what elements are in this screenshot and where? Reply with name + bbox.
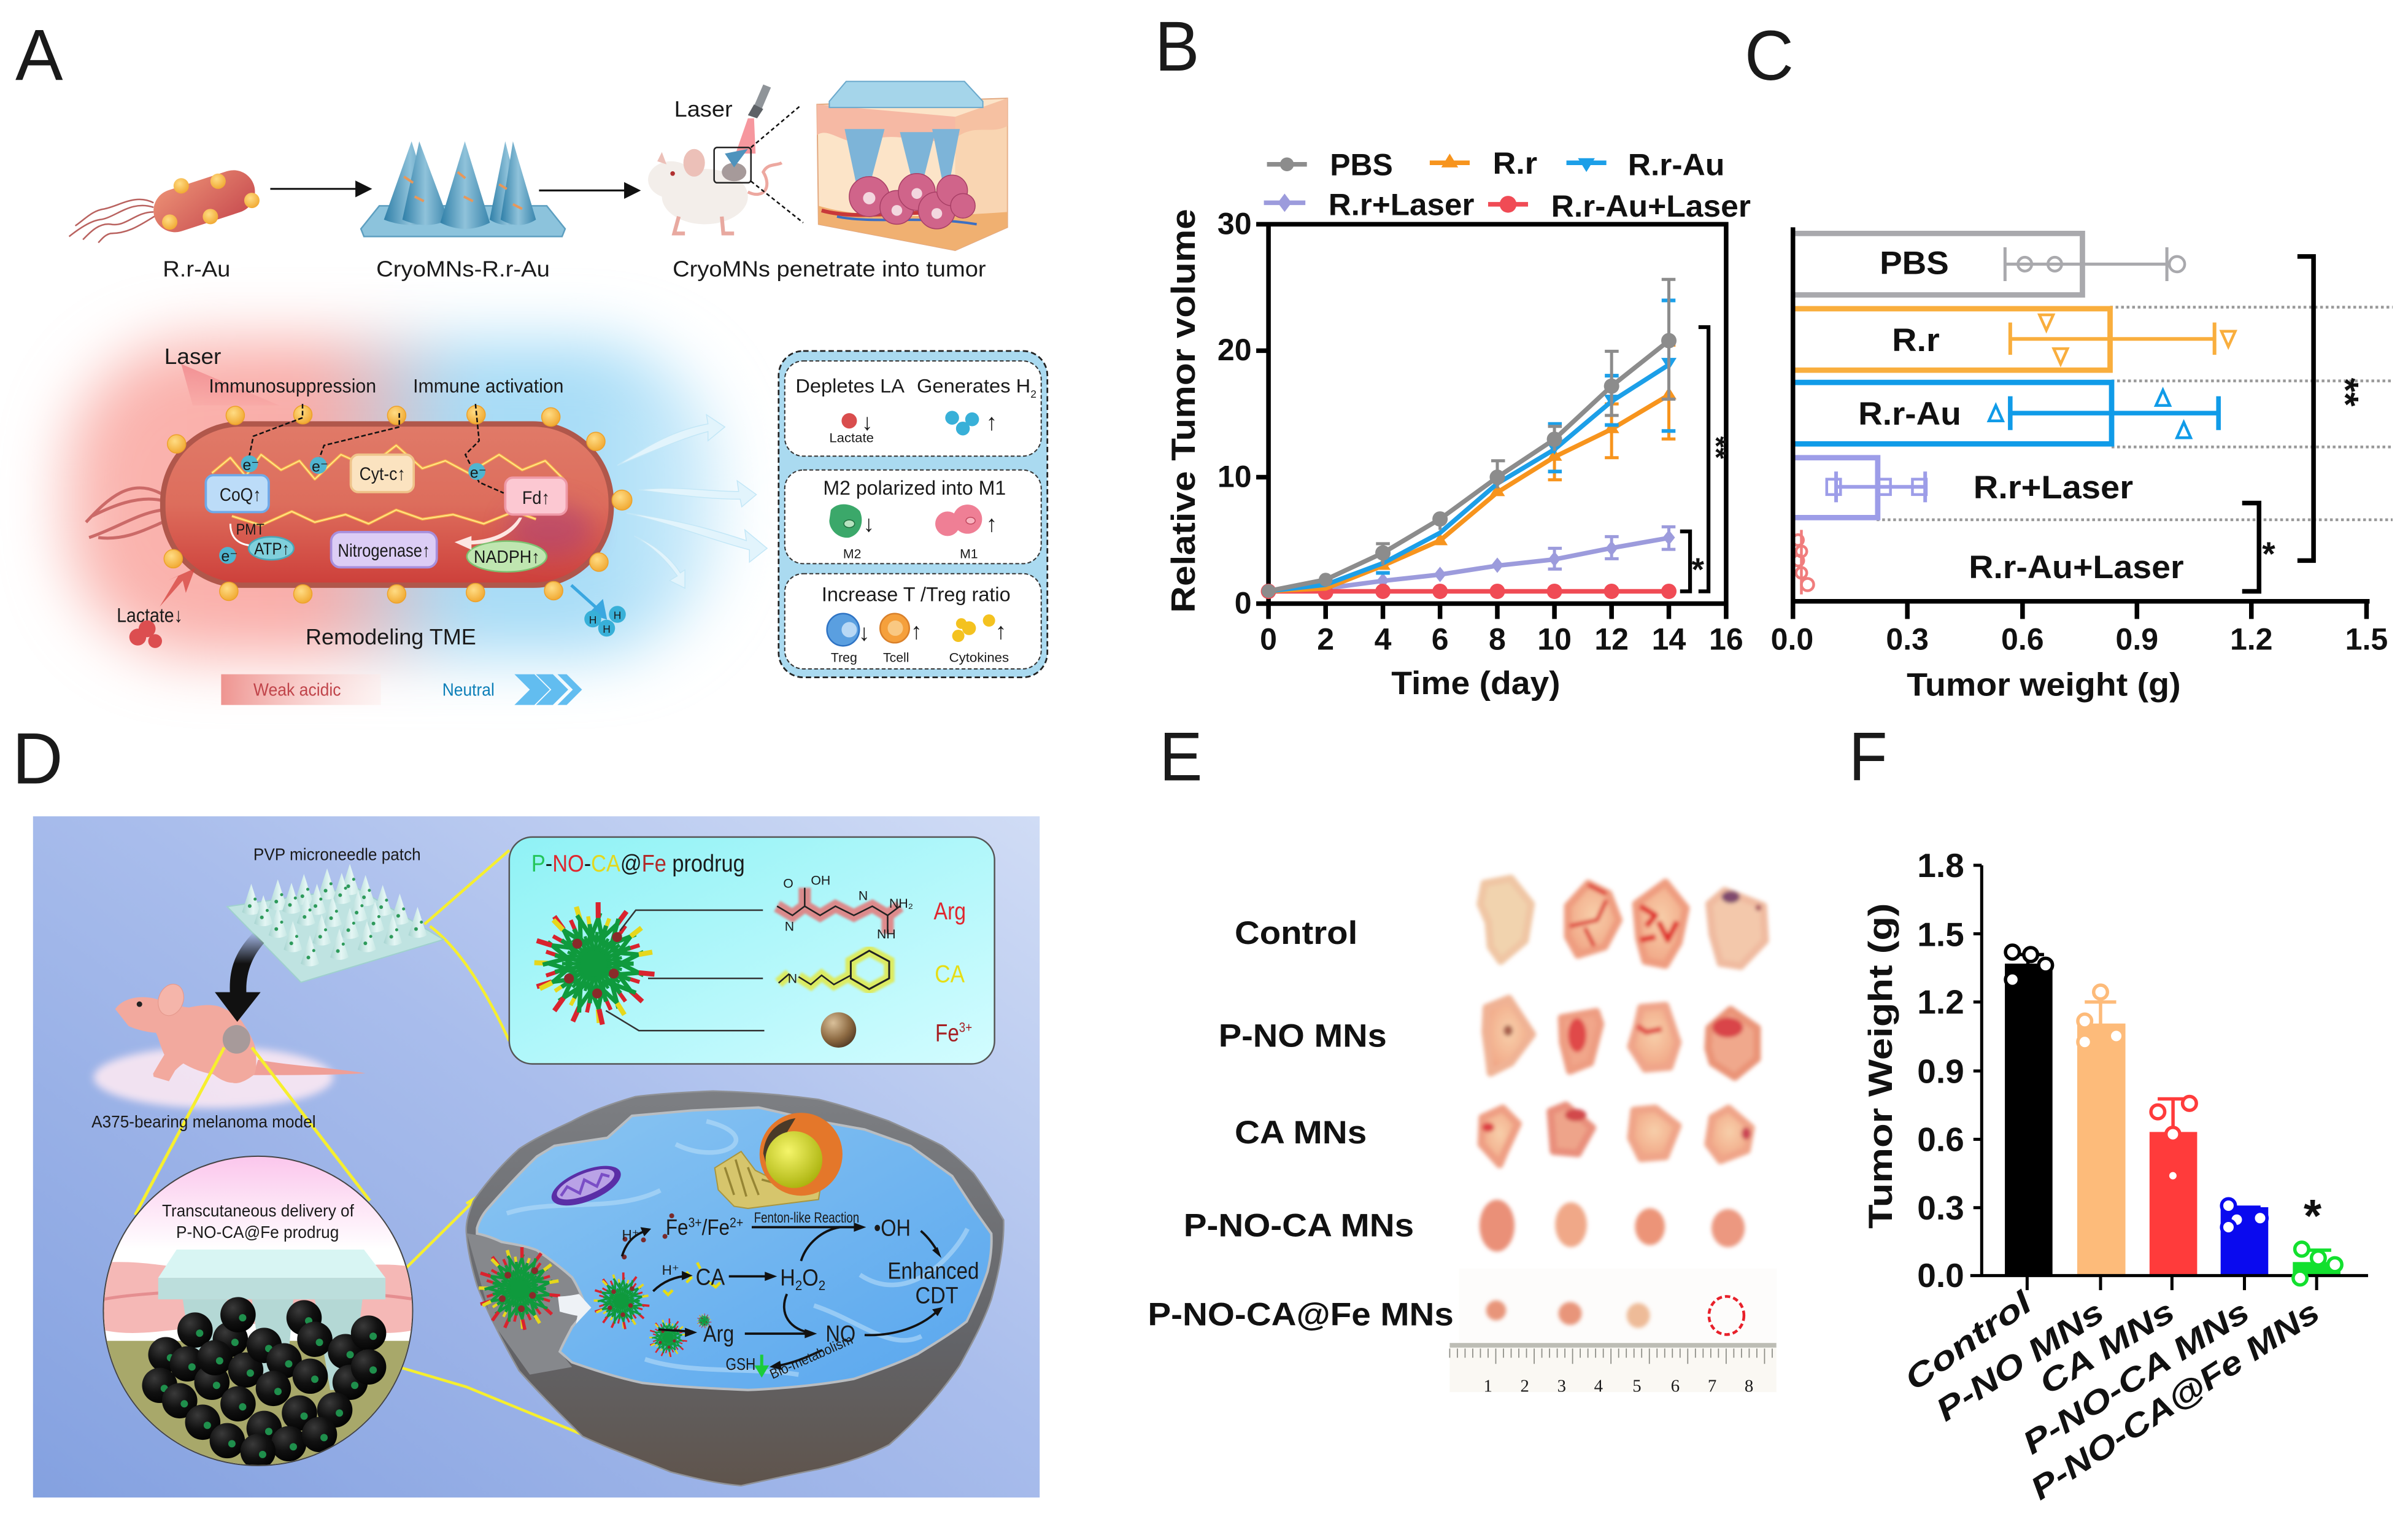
inset label: Transcutaneous delivery of xyxy=(162,1201,354,1220)
x axis ticks xyxy=(1260,622,1743,657)
dashed circle: no tumor xyxy=(1709,1296,1744,1334)
ruler: 3 xyxy=(1557,1376,1566,1396)
bacterium capsule xyxy=(163,424,611,585)
label: Arg: Arg xyxy=(934,898,966,925)
box: Cyt-c xyxy=(351,455,414,492)
released CA fragments xyxy=(663,1262,720,1295)
tumor photos xyxy=(1480,878,1765,1328)
arrow: Fd to Nitrogenase xyxy=(455,517,522,550)
label: Enhanced CDT xyxy=(887,1258,979,1308)
legend: Neutral: Neutral xyxy=(442,681,495,700)
dendrimer entering cell xyxy=(479,1247,560,1330)
label: Fe3+/Fe2+: Fe xyxy=(666,1215,692,1240)
y axis ticks: 0 xyxy=(1235,586,1252,620)
panel letter F: F xyxy=(1849,717,1888,795)
significance star: * xyxy=(2304,1190,2322,1242)
bar: R.r xyxy=(1792,309,2235,370)
x labels: P-NO MNs xyxy=(1930,1294,2110,1429)
y axis title: Relative Tumor volume xyxy=(1164,209,1202,613)
yellow zoom connectors xyxy=(338,850,586,1436)
box: lactate and hydrogen: Lactate xyxy=(829,431,874,446)
ruler: 5 xyxy=(1632,1376,1642,1396)
y axis ticks: 1.5 xyxy=(1917,916,1964,954)
panel D xyxy=(12,718,1040,1498)
panel: therapeutic effects xyxy=(779,351,1048,678)
x axis ticks: 8 xyxy=(1489,622,1506,657)
chart frame xyxy=(1256,224,1726,619)
box: T cell to Treg ratio: ↓ xyxy=(859,620,870,646)
label: Fe3+/Fe2+: 2+ xyxy=(730,1215,743,1231)
leader lines xyxy=(606,910,765,1030)
box: lactate and hydrogen: ↑ xyxy=(986,409,997,435)
data points: Control xyxy=(2005,945,2053,986)
background glow: tumor microenvironment acid to neutral xyxy=(68,341,720,656)
legend bar: Weak acidic xyxy=(221,674,381,705)
structure: Arg xyxy=(777,873,913,941)
x axis ticks: 4 xyxy=(1375,622,1392,657)
y axis ticks: 0.9 xyxy=(1917,1052,1964,1090)
series: R.r-Au+Laser xyxy=(1261,584,1677,600)
lactate uptake arrow xyxy=(160,568,195,606)
electrons: e⁻ xyxy=(221,548,237,565)
panel E xyxy=(1148,717,1777,1396)
structure: CA xyxy=(779,951,889,989)
electrons xyxy=(219,455,487,565)
label: PVP microneedle patch: PVP microneedle patch xyxy=(253,845,421,864)
icon: H2 molecules: H xyxy=(614,609,621,622)
y axis title: Tumor Weight (g) xyxy=(1861,903,1899,1229)
icon: H2 molecules xyxy=(584,606,626,636)
icon: microneedle patch xyxy=(227,864,444,983)
x axis ticks: 0.9 xyxy=(2116,622,2158,657)
ruler: 2 xyxy=(1521,1376,1529,1396)
panel F xyxy=(1849,717,2368,1507)
y axis ticks: 1.8 xyxy=(1917,846,1964,884)
ruler xyxy=(1449,1343,1777,1396)
box: lactate and hydrogen xyxy=(785,361,1041,456)
box: T cell to Treg ratio: Treg xyxy=(831,651,857,665)
label: Lactate decreased: Lactate↓ xyxy=(117,605,183,627)
white effect arrows xyxy=(617,415,767,588)
prodrug title: P-NO-CA@Fe prodrug xyxy=(531,851,745,877)
label: GSH: GSH xyxy=(725,1355,755,1374)
x labels: CA MNs xyxy=(2033,1293,2181,1402)
gold nanoparticles xyxy=(164,406,632,603)
data points: P-NO-CA MNs xyxy=(2221,1199,2267,1234)
label: H2O2: O xyxy=(802,1265,819,1291)
electrons: e⁻ xyxy=(470,464,487,481)
y axis ticks: 1.2 xyxy=(1917,983,1964,1021)
box: Nitrogenase xyxy=(331,532,437,567)
icon: lactate molecules xyxy=(129,620,162,648)
label: CA: CA xyxy=(935,960,965,988)
x labels xyxy=(1898,1284,2326,1507)
x labels: P-NO-CA@Fe MNs xyxy=(2024,1294,2326,1507)
white uptake arrow xyxy=(558,1294,591,1324)
bar labels: R.r-Au xyxy=(1858,396,1961,432)
structure: Arg: NH₂ xyxy=(889,896,913,911)
label: H+: H⁺ xyxy=(662,1262,679,1278)
axes xyxy=(1791,227,2369,619)
electrons: e⁻ xyxy=(242,457,260,474)
icon: H2 molecules: H xyxy=(589,614,596,626)
label: Immune activation: Immune activation xyxy=(413,375,563,396)
arrow xyxy=(539,184,639,198)
row labels: Control xyxy=(1235,915,1357,951)
structure: Arg: NH xyxy=(877,927,896,941)
x axis ticks: 1.5 xyxy=(2345,622,2388,657)
panel: prodrug composition xyxy=(509,837,995,1064)
bar labels xyxy=(1858,245,2184,586)
significance brackets xyxy=(2242,257,2366,591)
tumor on mouse xyxy=(223,1025,250,1054)
arrow xyxy=(270,182,370,196)
electron lightning lines xyxy=(212,446,563,525)
laser beam xyxy=(181,364,279,406)
bar: R.r+Laser xyxy=(1792,458,1926,517)
pathway arrows xyxy=(622,1227,938,1366)
label: Fe3+: Fe xyxy=(935,1020,964,1047)
dashed zoom lines xyxy=(751,106,803,223)
series: PBS xyxy=(1262,279,1677,598)
panel background xyxy=(33,816,1040,1498)
label: R.r-Au: R.r-Au xyxy=(163,256,230,281)
box: macrophage polarization: M1 xyxy=(960,547,978,562)
hydrogen release arrow xyxy=(571,585,605,617)
label: CryoMNs-R.r-Au: CryoMNs-R.r-Au xyxy=(376,256,550,281)
label: Laser: Laser xyxy=(674,96,733,122)
box: Cyt-c: Cyt-c↑ xyxy=(360,464,406,484)
structure: Arg: N xyxy=(785,919,794,934)
label: H2O2: 2 xyxy=(795,1278,802,1293)
box: CoQ xyxy=(206,475,269,512)
white glow under mouse xyxy=(94,1046,333,1108)
y axis ticks: 10 xyxy=(1218,459,1252,493)
bar: R.r-Au xyxy=(1792,382,2218,444)
box: Nitrogenase: Nitrogenase↑ xyxy=(338,541,430,561)
box: T cell to Treg ratio: ↑ xyxy=(995,618,1006,644)
box: T cell to Treg ratio: ↑ xyxy=(911,618,922,644)
x axis ticks xyxy=(1771,622,2388,657)
arrow: PMT to ATP xyxy=(230,524,249,545)
yellow connector from tumor xyxy=(135,1048,370,1215)
label: CryoMNs penetrate into tumor: CryoMNs penetrate into tumor xyxy=(673,256,986,281)
x labels: P-NO-CA MNs xyxy=(2016,1293,2256,1461)
box: T cell to Treg ratio: Tcell xyxy=(883,651,909,665)
bar labels: R.r xyxy=(1892,322,1940,358)
electron transfer paths xyxy=(248,404,504,493)
x axis ticks: 0.0 xyxy=(1771,622,1813,657)
structure: Arg: N xyxy=(859,888,868,903)
box: Fd: Fd↑ xyxy=(522,488,550,508)
box: T cell to Treg ratio: Increase T /Treg ratio xyxy=(822,584,1011,606)
label: Fe3+: 3+ xyxy=(959,1020,972,1035)
significance brackets: ** xyxy=(1699,436,1732,459)
icon: H2 molecules: H xyxy=(603,623,611,635)
box: macrophage polarization: M2 polarized into M1 xyxy=(823,477,1006,499)
row labels: P-NO-CA MNs xyxy=(1184,1208,1414,1244)
data points: P-NO-CA@Fe MNs xyxy=(2293,1242,2342,1285)
legend: R.r-Au xyxy=(1628,147,1724,182)
x axis ticks: 0 xyxy=(1260,622,1277,657)
label: Arg: Arg xyxy=(703,1321,734,1347)
box: macrophage polarization: ↓ xyxy=(863,511,874,536)
box: lactate and hydrogen: Generates H xyxy=(917,375,1030,396)
panel letter B: B xyxy=(1155,7,1199,86)
y axis ticks xyxy=(1218,207,1252,620)
x axis ticks: 0.6 xyxy=(2001,622,2044,657)
legend: R.r xyxy=(1492,146,1537,180)
label: H2O2: 2 xyxy=(819,1278,825,1293)
label: Immunosuppression: Immunosuppression xyxy=(209,375,376,396)
row labels: P-NO-CA@Fe MNs xyxy=(1148,1297,1454,1333)
bar labels: R.r-Au+Laser xyxy=(1969,549,2184,586)
label: Fe3+/Fe2+: /Fe xyxy=(702,1215,730,1240)
axes xyxy=(1970,865,2368,1290)
ruler: 4 xyxy=(1594,1376,1603,1396)
label: H2O2: H xyxy=(780,1265,797,1291)
box: T cell to Treg ratio: Cytokines xyxy=(949,651,1009,665)
box: macrophage polarization: M2 xyxy=(843,547,861,562)
icon: R.r-Au bacterium xyxy=(69,164,261,242)
dendrimer releasing Arg xyxy=(649,1318,687,1357)
icon: laser device xyxy=(736,85,771,153)
label: Laser: Laser xyxy=(164,344,221,369)
box: Fd xyxy=(505,477,566,514)
dendrimer nanoparticle xyxy=(534,902,655,1024)
x axis ticks: 6 xyxy=(1432,622,1449,657)
data points: CA MNs xyxy=(2151,1097,2196,1181)
label: Fenton-like Reaction: Fenton-like Reaction xyxy=(754,1210,859,1226)
inset: transcutaneous delivery xyxy=(102,1155,414,1466)
ruler: 7 xyxy=(1708,1376,1716,1396)
icon: nude mouse xyxy=(115,981,366,1083)
box: macrophage polarization xyxy=(785,470,1041,563)
x labels: Control xyxy=(1898,1284,2039,1398)
label: Remodeling TME: Remodeling TME xyxy=(306,624,476,649)
pathway arrowheads xyxy=(641,1223,943,1370)
bar labels: R.r+Laser xyxy=(1974,470,2133,506)
box: CoQ: CoQ↑ xyxy=(220,485,261,505)
row labels xyxy=(1148,915,1454,1333)
box: lactate and hydrogen: Depletes LA xyxy=(795,375,905,396)
icon: cryo microneedles xyxy=(361,141,565,236)
ruler: 8 xyxy=(1745,1376,1753,1396)
curved arrow to mouse xyxy=(215,932,264,1022)
icon: golgi apparatus xyxy=(715,1151,820,1208)
ellipse: ATP: ATP↑ xyxy=(254,539,290,558)
ruler: 1 xyxy=(1483,1376,1492,1396)
illustration: microneedles penetrating tumor tissue xyxy=(817,82,1008,250)
released iron particles xyxy=(622,1213,674,1259)
label: OH radical: •OH xyxy=(874,1215,911,1240)
x axis ticks: 0.3 xyxy=(1886,622,1929,657)
ruler: 6 xyxy=(1671,1376,1680,1396)
legend chevrons xyxy=(514,674,582,705)
y axis ticks: 0.6 xyxy=(1917,1121,1964,1159)
box: macrophage polarization: ↑ xyxy=(986,511,997,536)
x axis ticks: 1.2 xyxy=(2230,622,2273,657)
bars xyxy=(2005,964,2340,1275)
floor sheen xyxy=(507,1121,968,1375)
bar: R.r-Au+Laser xyxy=(1792,530,1814,594)
label: Fe3+/Fe2+: 3+ xyxy=(688,1215,702,1231)
label: CA: CA xyxy=(696,1264,725,1289)
series: R.r+Laser xyxy=(1268,527,1675,591)
legend: R.r-Au+Laser xyxy=(1551,189,1751,223)
legend bar: Weak acidic: Weak acidic xyxy=(253,681,341,700)
label: Enhanced CDT: Enhanced xyxy=(887,1258,979,1283)
x axis ticks: 14 xyxy=(1652,622,1686,657)
flagella xyxy=(86,488,163,538)
dendrimer in cytoplasm xyxy=(594,1272,649,1329)
data points: P-NO MNs xyxy=(2078,985,2123,1049)
x axis title: Tumor weight (g) xyxy=(1907,667,2181,703)
label: Bio-metabolism: Bio-metabolism xyxy=(768,1332,855,1382)
row labels: CA MNs xyxy=(1235,1115,1367,1151)
label: A375-bearing melanoma model: A375-bearing melanoma model xyxy=(91,1112,316,1131)
legend: PBS xyxy=(1330,147,1393,182)
panel letter C: C xyxy=(1745,17,1794,95)
x axis title: Time (day) xyxy=(1391,665,1561,702)
row labels: P-NO MNs xyxy=(1219,1018,1387,1054)
y axis ticks: 0.0 xyxy=(1917,1256,1964,1294)
ellipse: NADPH xyxy=(467,541,547,572)
significance brackets: ** xyxy=(2325,378,2366,407)
light photo background xyxy=(1459,1269,1777,1344)
y axis ticks: 0.3 xyxy=(1917,1189,1964,1227)
box: lactate and hydrogen: ↓ xyxy=(862,409,873,435)
electrons: e⁻ xyxy=(312,458,328,475)
structure: Arg: OH xyxy=(811,873,830,887)
panel A xyxy=(15,15,1048,705)
significance brackets: * xyxy=(1692,552,1705,588)
GSH decrease arrow xyxy=(757,1355,766,1375)
series: R.r-Au xyxy=(1268,300,1677,591)
icon: mitochondrion xyxy=(546,1158,626,1214)
inset: transcutaneous delivery: P-NO-CA@Fe prodrug xyxy=(176,1223,339,1242)
y axis ticks xyxy=(1917,846,1964,1294)
icon: nucleus xyxy=(760,1113,843,1196)
icon: mouse with microneedle xyxy=(648,147,782,233)
box: lactate and hydrogen: 2 xyxy=(1030,388,1036,400)
x axis ticks: 2 xyxy=(1317,622,1334,657)
label: NO: NO xyxy=(825,1321,855,1347)
legend xyxy=(1264,146,1751,223)
bar: PBS xyxy=(1792,233,2185,295)
panel B xyxy=(1155,7,1751,702)
bar labels: PBS xyxy=(1880,245,1949,282)
panel letter D: D xyxy=(12,718,63,798)
dotted guide lines xyxy=(1877,307,2393,520)
Fe sphere xyxy=(821,1012,856,1048)
label: PMT: PMT xyxy=(236,521,264,538)
y axis ticks: 20 xyxy=(1218,333,1252,367)
label: Enhanced CDT: CDT xyxy=(916,1282,959,1308)
y axis ticks: 30 xyxy=(1218,207,1252,241)
series: R.r xyxy=(1268,345,1677,591)
panel letter E: E xyxy=(1159,717,1202,795)
cell illustration xyxy=(466,1091,1004,1486)
panel letter A: A xyxy=(15,15,63,95)
structure: CA: N xyxy=(788,972,797,986)
box: T cell to Treg ratio xyxy=(785,574,1041,669)
legend: R.r+Laser xyxy=(1329,187,1474,222)
ellipse: NADPH: NADPH↑ xyxy=(474,547,540,567)
significance brackets: * xyxy=(2262,535,2275,573)
x axis ticks: 12 xyxy=(1594,622,1629,657)
label: H+: H⁺ xyxy=(622,1227,639,1243)
structure: Arg: O xyxy=(783,876,793,891)
x axis ticks: 16 xyxy=(1709,622,1743,657)
small dendrimer xyxy=(697,1313,711,1328)
x axis ticks: 10 xyxy=(1537,622,1572,657)
significance brackets xyxy=(1680,327,1732,591)
panel C xyxy=(1745,17,2393,703)
